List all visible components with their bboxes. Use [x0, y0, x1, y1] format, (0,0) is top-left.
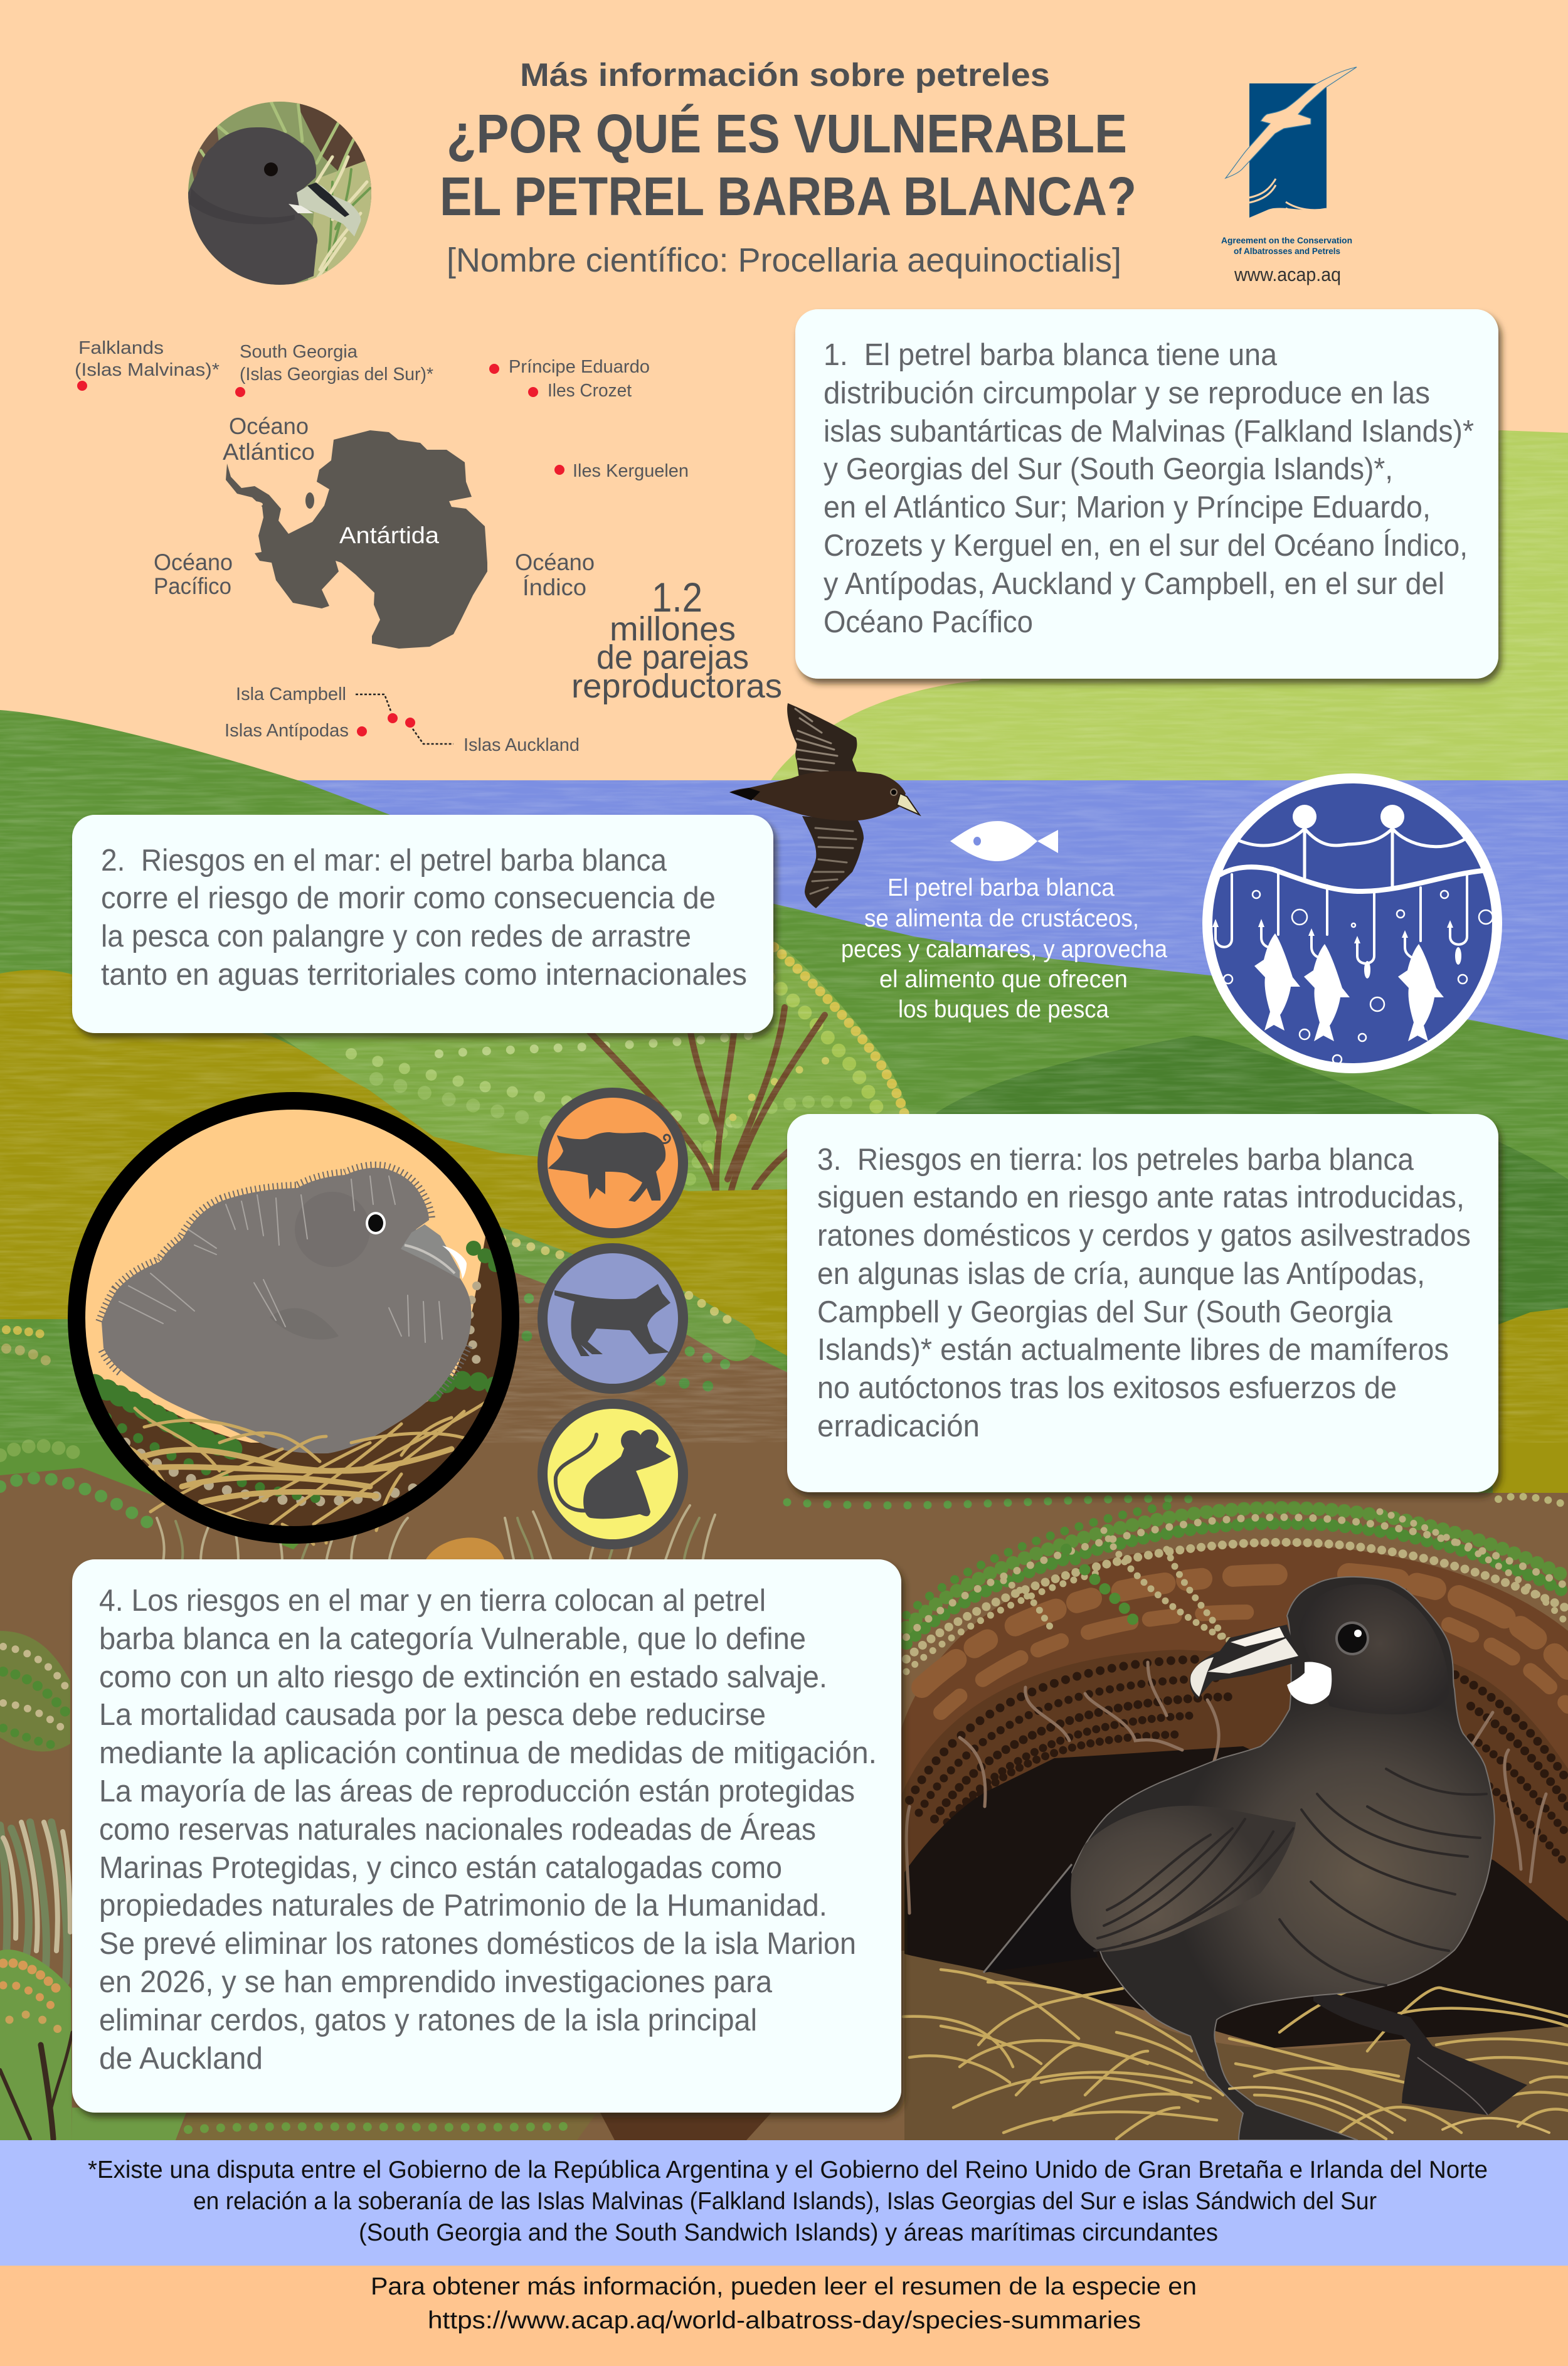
photo of petrel head: [188, 100, 376, 289]
speckles: [909, 1659, 1568, 1866]
dark stems: [0, 2032, 447, 2139]
map of Antarctica: [75, 338, 689, 755]
hooked fish: [1254, 933, 1444, 1041]
Prince Edward label: Príncipe Eduardo: [509, 357, 650, 377]
South Georgia dot: [235, 387, 245, 397]
feather lines: [1094, 1769, 1486, 1985]
mound moss: [82, 1248, 502, 1501]
card 4: conservation status: [72, 1559, 901, 2113]
card text: tanto en aguas territoriales como internacionales: [101, 958, 747, 992]
card text: y Georgias del Sur (South Georgia Islands)*,: [824, 452, 1393, 486]
Kerguelen dot: [554, 465, 564, 475]
chick eye: [366, 1212, 386, 1234]
background: moss slope: [0, 1239, 1568, 1524]
black ring: [77, 1101, 511, 1535]
wing: [1071, 1806, 1296, 1952]
card text: la pesca con palangre y con redes de arrastre: [101, 920, 691, 953]
tail: [983, 1864, 1098, 1973]
card background: [787, 1114, 1498, 1492]
more information band: Para obtener más información, pueden leer el resumen de la especie en: [371, 2273, 1197, 2300]
eye: [891, 789, 897, 795]
icon: cat: [543, 1248, 683, 1389]
background: right olive slope: [1493, 1308, 1568, 1518]
grass tufts above card four: [157, 1505, 715, 1562]
background: texture: [0, 427, 1568, 1493]
card text: 1. El petrel barba blanca tiene una: [824, 338, 1278, 372]
Indian label two: Índico: [522, 575, 586, 600]
head and body: [188, 127, 317, 289]
body: [729, 771, 906, 820]
continent label: Antártida: [339, 523, 439, 548]
card 3: risks on land: [787, 1114, 1498, 1492]
beak highlights: [405, 1245, 455, 1273]
card background: [72, 1559, 901, 2113]
background: green slope: [0, 710, 1568, 1568]
footnote band: [0, 2140, 1568, 2266]
eye: [1335, 1621, 1369, 1655]
diet caption: los buques de pesca: [898, 996, 1109, 1023]
Auckland label: Islas Auckland: [464, 735, 580, 755]
kicker: Más información sobre petreles: [520, 57, 1050, 93]
card text: 3. Riesgos en tierra: los petreles barba blanca: [817, 1143, 1414, 1177]
Crozet dot: [528, 387, 538, 397]
card text: 2. Riesgos en el mar: el petrel barba blanca: [101, 844, 667, 878]
neck shade: [226, 210, 284, 225]
card text: Islands)* están actualmente libres de mamíferos: [817, 1333, 1449, 1367]
icon: mouse: [543, 1404, 683, 1544]
Malvinas label: (Islas Malvinas)*: [75, 360, 220, 380]
beak: [1190, 1625, 1298, 1699]
down fringe: [102, 1168, 467, 1396]
card text: Crozets y Kerguel en, en el sur del Océano Índico,: [824, 529, 1468, 563]
title line one: ¿POR QUÉ ES VULNERABLE: [447, 103, 1127, 164]
beak: [297, 184, 361, 236]
card text: La mayoría de las áreas de reproducción están protegidas: [99, 1774, 855, 1808]
photo backdrop: [188, 102, 372, 285]
card 1: distribution: [795, 309, 1498, 679]
card text: Marinas Protegidas, y cinco están catalogadas como: [99, 1851, 782, 1885]
background: dark green hill: [878, 1036, 1568, 1330]
upper wing: [787, 703, 858, 778]
nest mound: [75, 1233, 514, 1556]
background: brown earth: [0, 1248, 1568, 2140]
island: [305, 492, 314, 509]
head shading: [295, 1192, 370, 1267]
background: olive hill: [0, 970, 878, 1405]
earth arch: [897, 1650, 1568, 1951]
more information band: [0, 2266, 1568, 2366]
card background: [795, 309, 1498, 679]
fish icon: [950, 821, 1058, 861]
card text: barba blanca en la categoría Vulnerable, que lo define: [99, 1622, 806, 1656]
earth bands: [897, 1544, 1568, 1819]
diet caption: el alimento que ofrecen: [879, 966, 1128, 993]
background: branches: [590, 1007, 825, 1195]
Georgias label: (Islas Georgias del Sur)*: [240, 364, 433, 385]
Atlantic label: Océano: [229, 413, 309, 439]
left grass tuft: [0, 1822, 70, 1982]
chick: [102, 1168, 471, 1453]
card text: distribución circumpolar y se reproduce en las: [824, 376, 1430, 410]
Atlantic label two: Atlántico: [223, 439, 315, 465]
straw in front of bird: [1229, 2087, 1549, 2133]
Auckland dot: [405, 718, 415, 728]
far leg and foot: [1313, 1991, 1527, 2115]
Campbell dot: [388, 713, 398, 723]
background: left lower green: [0, 1319, 100, 1480]
chick vignette: [75, 1101, 514, 1556]
albatross: [1226, 67, 1357, 178]
straw behind bird: [903, 1970, 1568, 2139]
card text: corre el riesgo de morir como consecuencia de: [101, 881, 716, 915]
body shading: [270, 1308, 339, 1340]
footnote band: en relación a la soberanía de las Islas Malvinas (Falkland Islands), Islas Georgias del Sur e islas Sándwich del Sur: [193, 2188, 1377, 2215]
nest straw: [119, 1396, 495, 1544]
card text: erradicación: [817, 1409, 980, 1443]
card background: [72, 815, 773, 1033]
Pacific label: Océano: [154, 549, 233, 575]
card text: y Antípodas, Auckland y Campbell, en el sur del: [824, 567, 1444, 601]
tail tip: [729, 788, 760, 800]
card text: en algunas islas de cría, aunque las Antípodas,: [817, 1257, 1425, 1291]
statistic: breeding pairs: [571, 574, 782, 705]
Falklands label: Falklands: [78, 338, 164, 358]
diet caption: El petrel barba blanca: [887, 874, 1115, 901]
chick beak: [401, 1224, 460, 1279]
more information band: https://www.acap.aq/world-albatross-day/species-summaries: [428, 2307, 1141, 2334]
icon: pig: [543, 1093, 683, 1233]
white gape: [289, 204, 314, 213]
eye: [264, 162, 278, 176]
card text: en el Atlántico Sur; Marion y Príncipe Eduardo,: [824, 491, 1431, 524]
body: [1072, 1577, 1495, 2140]
card text: Océano Pacífico: [824, 605, 1033, 639]
lower wing: [802, 816, 864, 908]
card text: La mortalidad causada por la pesca debe reducirse: [99, 1698, 766, 1732]
continent: [226, 430, 487, 649]
card 2: risks at sea: [72, 815, 773, 1033]
tail edge: [983, 1864, 1072, 1973]
diet caption: se alimenta de crustáceos,: [864, 905, 1139, 932]
big petrel illustration: [983, 1577, 1527, 2140]
card text: como reservas naturales nacionales rodeadas de Áreas: [99, 1813, 816, 1847]
orange shrub: [425, 1537, 505, 1562]
bottom-left bush: [0, 1950, 72, 2140]
blue panel: [1249, 83, 1327, 218]
near foot web line: [1417, 2057, 1488, 2115]
card text: [99, 1584, 877, 2076]
background: sea: [251, 780, 1568, 1069]
scientific name: [Nombre científico: Procellaria aequinoctialis]: [447, 241, 1121, 279]
down streaks: [119, 1176, 442, 1342]
diet caption: [841, 874, 1167, 1023]
white chin patch: [1287, 1662, 1332, 1704]
leader lines: [356, 694, 453, 744]
card text: ratones domésticos y cerdos y gatos asilvestrados: [817, 1219, 1471, 1253]
longline fishing emblem: [1207, 778, 1497, 1068]
Indian label: Océano: [515, 549, 595, 575]
card text: [824, 338, 1474, 639]
card text: en 2026, y se han emprendido investigaciones para: [99, 1965, 773, 1999]
down body: [102, 1168, 471, 1453]
Campbell label: Isla Campbell: [236, 684, 346, 704]
Antipodes dot: [357, 726, 367, 736]
roots: [906, 1662, 1546, 1913]
card text: [817, 1143, 1471, 1443]
title block: [440, 57, 1136, 279]
descriptor two: reproductoras: [571, 667, 782, 705]
burrow opening: [904, 1746, 1568, 2048]
upper wing feathers: [795, 709, 837, 772]
grass blades: [201, 102, 373, 289]
diet caption: peces y calamares, y aprovecha: [841, 936, 1167, 963]
Prince Edward dot: [489, 364, 499, 374]
footnote band: *Existe una disputa entre el Gobierno de la República Argentina y el Gobierno del Reino Unido de Gran Bretaña e Irlanda del Norte: [88, 2156, 1488, 2183]
card text: siguen estando en riesgo ante ratas introducidas,: [817, 1180, 1465, 1214]
background: bush: [270, 941, 922, 1198]
bubbles: [1224, 891, 1493, 1064]
flying petrel: [729, 703, 919, 908]
title line two: EL PETREL BARBA BLANCA?: [440, 166, 1136, 227]
unit: millones: [610, 610, 736, 648]
card text: propiedades naturales de Patrimonio de la Humanidad.: [99, 1889, 827, 1923]
Antipodes label: Islas Antípodas: [225, 721, 349, 741]
ground: [904, 1954, 1568, 2140]
white hook: [442, 1246, 467, 1279]
lower wing feathers: [810, 828, 856, 894]
vignette fill: [77, 1101, 511, 1535]
bill: [897, 793, 919, 815]
card text: no autóctonos tras los exitosos esfuerzos de: [817, 1371, 1397, 1405]
Falklands dot: [77, 381, 87, 391]
hooks: [1216, 872, 1467, 963]
background: light green hill: [740, 430, 1568, 815]
Pacific label two: Pacífico: [154, 573, 231, 599]
background: left moss patch: [0, 1631, 70, 1751]
agreement line one: Agreement on the Conservation: [1221, 236, 1352, 245]
number: 1.2: [652, 574, 702, 620]
card text: 4. Los riesgos en el mar y en tierra colocan al petrel: [99, 1584, 766, 1618]
card text: de Auckland: [99, 2042, 263, 2076]
South Georgia label: South Georgia: [240, 342, 358, 362]
bottom strip under card four: [72, 2108, 771, 2140]
agreement line two: of Albatrosses and Petrels: [1234, 247, 1340, 256]
emblem disc: [1207, 778, 1497, 1068]
island two: [244, 501, 263, 507]
card text: islas subantárticas de Malvinas (Falkland Islands)*: [824, 415, 1474, 448]
bait: [1212, 919, 1461, 979]
waves: [1249, 179, 1327, 218]
card text: eliminar cerdos, gatos y ratones de la isla principal: [99, 2003, 757, 2037]
floats: [1293, 805, 1404, 829]
moss band: [906, 1504, 1568, 1672]
card text: mediante la aplicación continua de medidas de mitigación.: [99, 1736, 877, 1770]
website: www.acap.aq: [1234, 263, 1341, 285]
card text: [101, 844, 747, 992]
card text: como con un alto riesgo de extinción en estado salvaje.: [99, 1660, 827, 1694]
burrow scene: [897, 1504, 1568, 2140]
mottled band: [922, 1574, 1568, 1712]
fishing gear: [1212, 805, 1493, 1064]
footnote band: (South Georgia and the South Sandwich Islands) y áreas marítimas circundantes: [359, 2219, 1218, 2246]
ACAP logo: [1221, 67, 1357, 285]
descriptor one: de parejas: [596, 639, 749, 676]
Kerguelen label: Iles Kerguelen: [573, 461, 689, 481]
head shade: [1298, 1584, 1449, 1714]
card text: Campbell y Georgias del Sur (South Georgia: [817, 1295, 1393, 1329]
card text: Se prevé eliminar los ratones domésticos de la isla Marion: [99, 1927, 856, 1961]
ropes: [1237, 829, 1466, 889]
bright grass: [308, 161, 371, 280]
Crozet label: Iles Crozet: [548, 381, 632, 401]
